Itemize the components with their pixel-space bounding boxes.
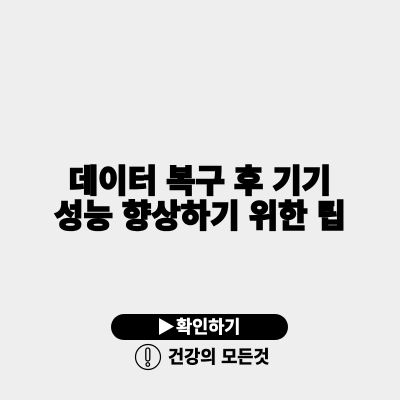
icon: play arrow (159, 318, 174, 335)
brand label: 건강의 모든것 (168, 344, 270, 369)
button label: 확인하기 (176, 314, 240, 339)
title (54, 156, 346, 237)
title: 데이터 복구 후 기기 (69, 156, 331, 202)
icon: exclamation circle (134, 344, 162, 370)
title: 성능 향상하기 위한 팁 (54, 191, 346, 237)
button: confirm (111, 314, 288, 340)
